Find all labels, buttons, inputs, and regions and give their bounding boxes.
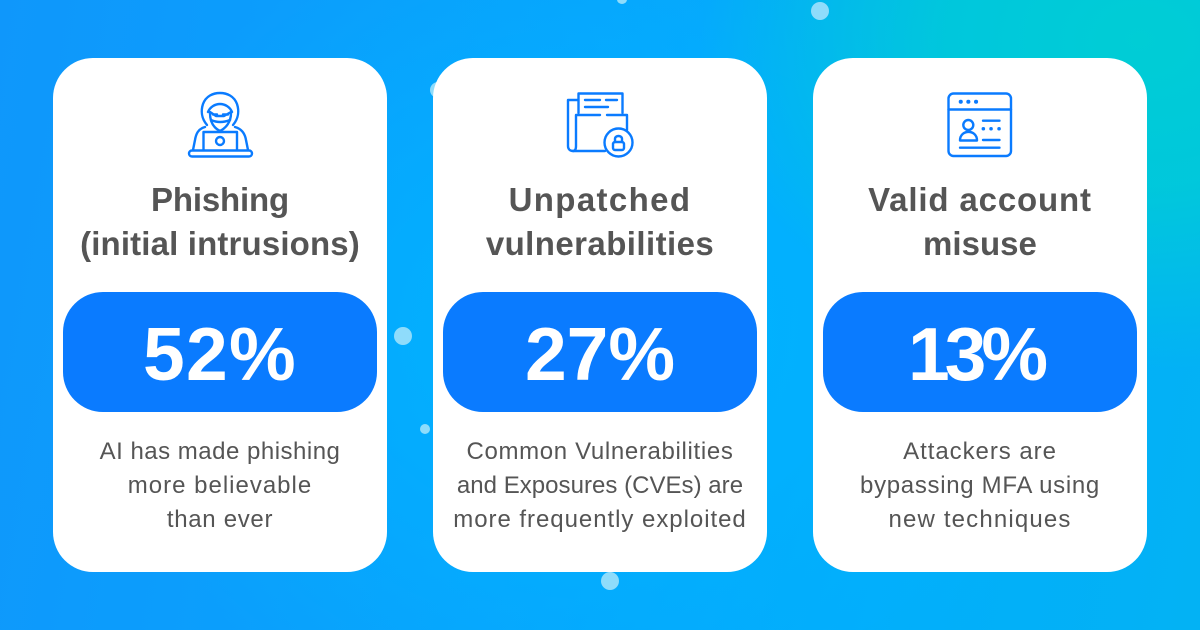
- icon: folder with lock: [566, 92, 634, 158]
- heading: vulnerabilities: [486, 225, 714, 262]
- stat: 13%: [823, 292, 1137, 412]
- heading: [80, 181, 360, 262]
- stat: 27%: 27%: [525, 312, 675, 396]
- heading: (initial intrusions): [80, 225, 360, 262]
- heading: Valid account: [868, 181, 1092, 218]
- stat: 52%: 52%: [143, 312, 297, 396]
- icon: hooded hacker at laptop: [188, 92, 254, 158]
- heading: [486, 181, 714, 262]
- decorative bubble mid: [394, 327, 412, 345]
- description: bypassing MFA using: [860, 472, 1100, 499]
- description: Attackers are: [903, 438, 1057, 465]
- decorative bubble bottom: [601, 572, 619, 590]
- description: new techniques: [888, 506, 1072, 533]
- panel: unpatched vulnerabilities: [433, 58, 767, 572]
- description: [860, 438, 1100, 533]
- stat: 27%: [443, 292, 757, 412]
- description: Common Vulnerabilities: [466, 438, 734, 465]
- heading: Phishing: [151, 181, 289, 218]
- description: and Exposures (CVEs) are: [457, 472, 743, 499]
- description: more believable: [128, 472, 312, 499]
- description: [453, 438, 747, 533]
- icon: browser window with user profile: [947, 92, 1012, 158]
- decorative bubble top: [617, 0, 627, 4]
- description: AI has made phishing: [100, 438, 340, 465]
- stat: 52%: [63, 292, 377, 412]
- description: more frequently exploited: [453, 506, 747, 533]
- heading: Unpatched: [509, 181, 691, 218]
- heading: [868, 181, 1092, 262]
- decorative bubble top right: [811, 2, 829, 20]
- decorative bubble behind card: [430, 82, 446, 98]
- stat: 13%: 13%: [908, 312, 1048, 396]
- heading: misuse: [923, 225, 1037, 262]
- decorative bubble small: [420, 424, 430, 434]
- panel: phishing: [53, 58, 387, 572]
- description: than ever: [167, 506, 273, 533]
- description: [100, 438, 340, 533]
- panel: valid account misuse: [813, 58, 1147, 572]
